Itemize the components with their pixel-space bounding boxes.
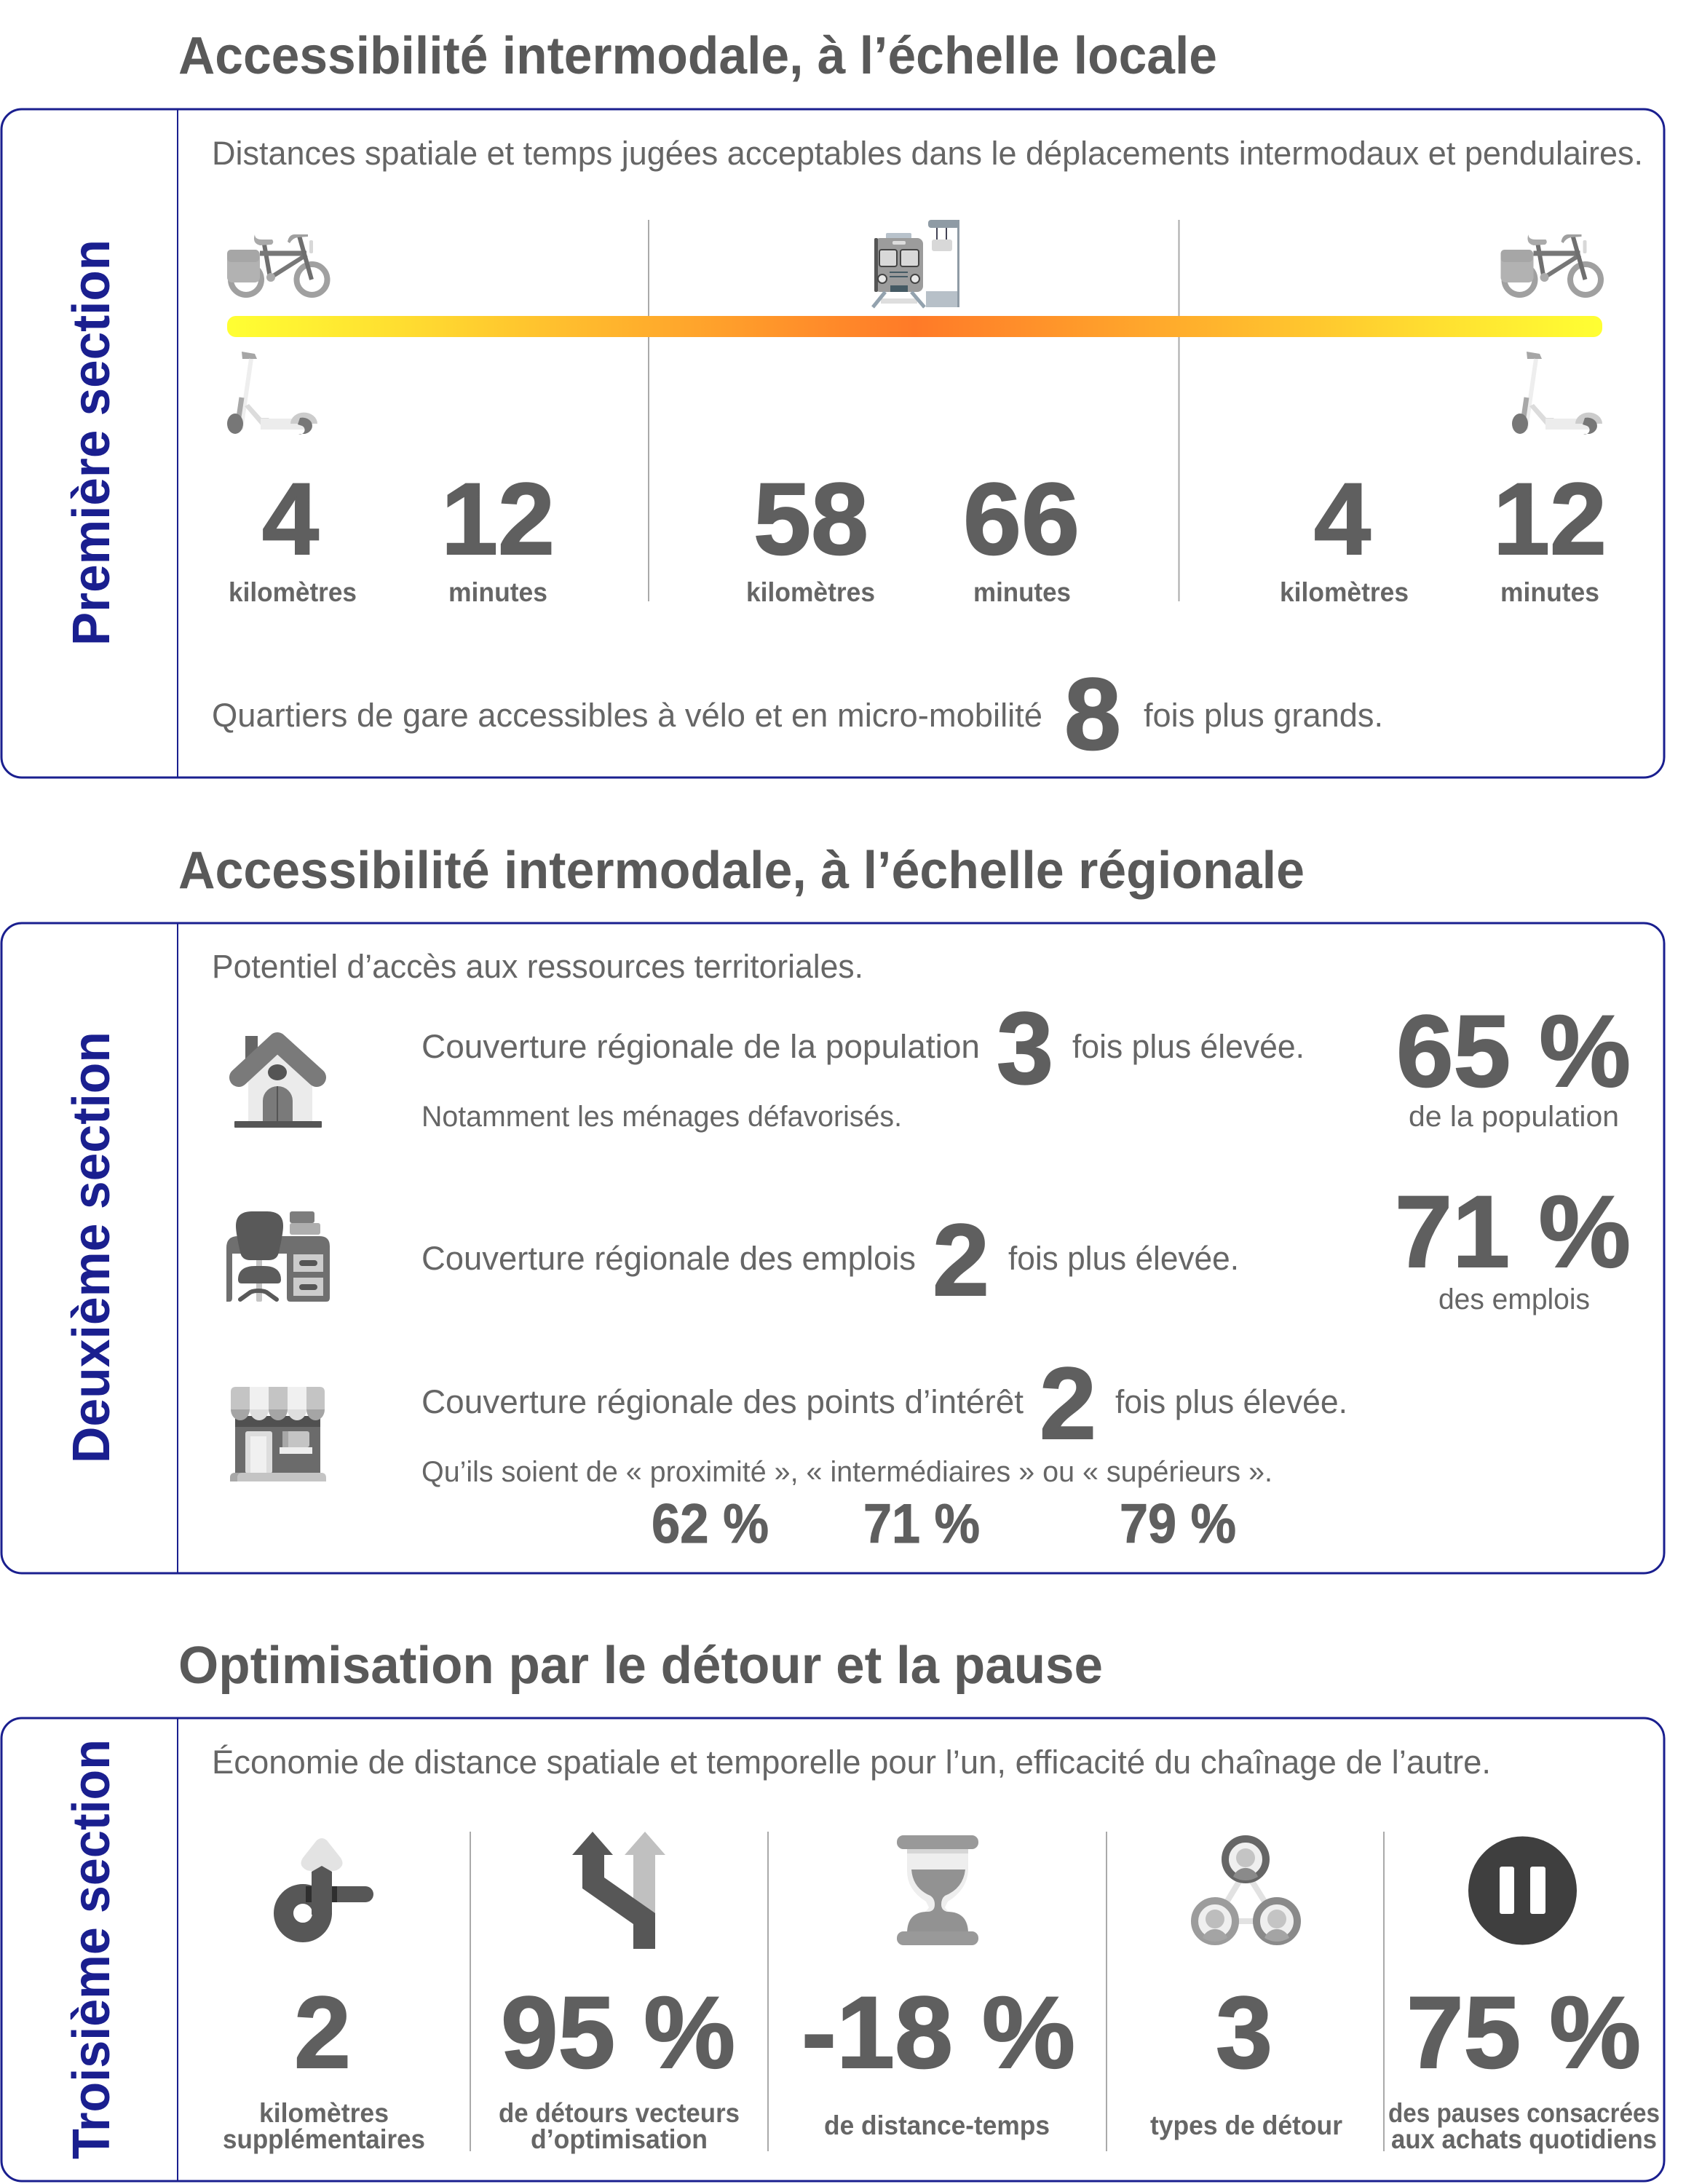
stat: 71 %: 71 % [863, 1493, 980, 1555]
stat: points of interest coverage 2 times: fois plus élevée. [1115, 1383, 1347, 1420]
stat: population coverage 3 times [421, 991, 1305, 1105]
stat: 79 %: 79 % [1120, 1493, 1236, 1555]
heading: detour and pause: Optimisation par le détour et la pause [178, 1637, 1103, 1695]
callout: station areas 8 times larger [212, 657, 1383, 771]
section label: première section: Première section [63, 240, 121, 646]
stat: jobs coverage 2 times [421, 1203, 1239, 1317]
section label: troisième section: Troisième section [63, 1739, 121, 2159]
stat: 95 % [499, 1975, 740, 2154]
heading: regional scale: Accessibilité intermodale, à l’échelle régionale [178, 842, 1305, 900]
stat: 2 kilomètres supplémentaires [223, 1975, 425, 2154]
icon: scooter left [227, 352, 317, 435]
stat: 3 types de détour: types de détour [1150, 2110, 1342, 2140]
icon: office desk [226, 1211, 330, 1302]
intro text: territorial resources: Potentiel d’accès aux ressources territoriales. [212, 948, 863, 985]
icon: three-node network [1195, 1839, 1297, 1942]
stat: 95 %: de détours vecteurs [499, 2098, 740, 2128]
stat: 4 kilomètres [229, 462, 357, 607]
stat: population coverage 3 times: Couverture régionale de la population [421, 1028, 980, 1065]
stat: 4 kilomètres right: kilomètres [1280, 577, 1409, 607]
stat: 2 kilomètres supplémentaires: kilomètres [259, 2098, 389, 2128]
stat: points of interest coverage 2 times: 2 [1040, 1346, 1096, 1460]
stat: jobs coverage 2 times: 2 [933, 1203, 989, 1317]
stat: 66 minutes: 66 [963, 462, 1080, 576]
stat: population coverage 3 times: 3 [997, 991, 1053, 1105]
icon: shop [230, 1387, 326, 1481]
stat: 4 kilomètres: kilomètres [229, 577, 357, 607]
stat: 12 minutes: minutes [448, 577, 547, 607]
gradient distance bar [227, 316, 1602, 337]
stat: -18 % [801, 1975, 1075, 2140]
stat: 3 types de détour: 3 [1216, 1975, 1272, 2089]
icon: bicycle left [227, 234, 328, 295]
intro text: distances: Distances spatiale et temps jugées acceptables dans le déplacements intermodaux et pendulaires. [212, 135, 1643, 172]
icon: pause button [1468, 1836, 1577, 1945]
stat: population coverage 3 times: fois plus élevée. [1072, 1028, 1305, 1065]
stat: 58 kilomètres [746, 462, 875, 607]
icon: detour loop [284, 1838, 373, 1932]
stat: 75 %: des pauses consacrées [1388, 2098, 1660, 2128]
callout: station areas 8 times larger: fois plus grands. [1144, 697, 1383, 734]
panel: deuxième section [1, 923, 1664, 1573]
stat: 75 %: 75 % [1406, 1975, 1641, 2089]
icon: hourglass [897, 1835, 978, 1945]
icon: diverging arrows [572, 1832, 665, 1949]
stat: 12 minutes right: 12 [1493, 462, 1607, 576]
stat: 58 kilomètres: 58 [753, 462, 868, 576]
stat: 71 % of jobs: 71 % [1395, 1174, 1631, 1289]
stat: jobs coverage 2 times: fois plus élevée. [1008, 1240, 1239, 1277]
note: disadvantaged households: Notamment les ménages défavorisés. [421, 1101, 902, 1133]
callout: station areas 8 times larger: 8 [1064, 657, 1121, 771]
stat: jobs coverage 2 times: Couverture régionale des emplois [421, 1240, 916, 1277]
stat: 4 kilomètres right: 4 [1314, 462, 1371, 576]
panel: troisième section [1, 1718, 1664, 2181]
icon: scooter right [1512, 352, 1602, 435]
icon: house [234, 1036, 322, 1128]
stat: 95 %: d’optimisation [531, 2124, 708, 2154]
stat: 75 % [1388, 1975, 1660, 2154]
icon: bicycle right [1501, 234, 1601, 295]
stat: 12 minutes right: minutes [1500, 577, 1599, 607]
stat: 4 kilomètres right [1280, 462, 1409, 607]
callout: station areas 8 times larger: Quartiers de gare accessibles à vélo et en micro-mobilité [212, 697, 1042, 734]
stat: points of interest coverage 2 times [421, 1346, 1347, 1460]
stat: 66 minutes: minutes [973, 577, 1071, 607]
section label: deuxième section: Deuxième section [63, 1032, 121, 1463]
heading: local scale: Accessibilité intermodale, à l’échelle locale [178, 27, 1217, 85]
icon: train and station [873, 220, 959, 307]
stat: 65 % of the population: de la population [1409, 1101, 1619, 1133]
stat: 3 types de détour [1150, 1975, 1342, 2140]
stat: 71 % of jobs: des emplois [1438, 1283, 1590, 1315]
stat: 2 kilomètres supplémentaires: 2 [294, 1975, 351, 2089]
stat: points of interest coverage 2 times: Couverture régionale des points d’intérêt [421, 1383, 1024, 1420]
stat: 2 kilomètres supplémentaires: supplémentaires [223, 2124, 425, 2154]
stat: 58 kilomètres: kilomètres [746, 577, 875, 607]
intro text: economy of distance: Économie de distance spatiale et temporelle pour l’un, efficacité du chaînage de l’autre. [212, 1744, 1491, 1781]
stat: 12 minutes: 12 [441, 462, 555, 576]
stat: 95 %: 95 % [501, 1975, 735, 2089]
stat: -18 %: -18 % [801, 1975, 1075, 2089]
panel: première section [1, 109, 1664, 778]
stat: 62 %: 62 % [652, 1493, 769, 1555]
stat: 65 % of the population: 65 % [1396, 994, 1631, 1108]
stat: 4 kilomètres: 4 [262, 462, 319, 576]
stat: -18 %: de distance-temps [824, 2110, 1050, 2140]
note: kinds of points of interest: Qu’ils soient de « proximité », « intermédiaires » ou « supérieurs ». [421, 1456, 1272, 1488]
stat: 75 %: aux achats quotidiens [1391, 2124, 1657, 2154]
